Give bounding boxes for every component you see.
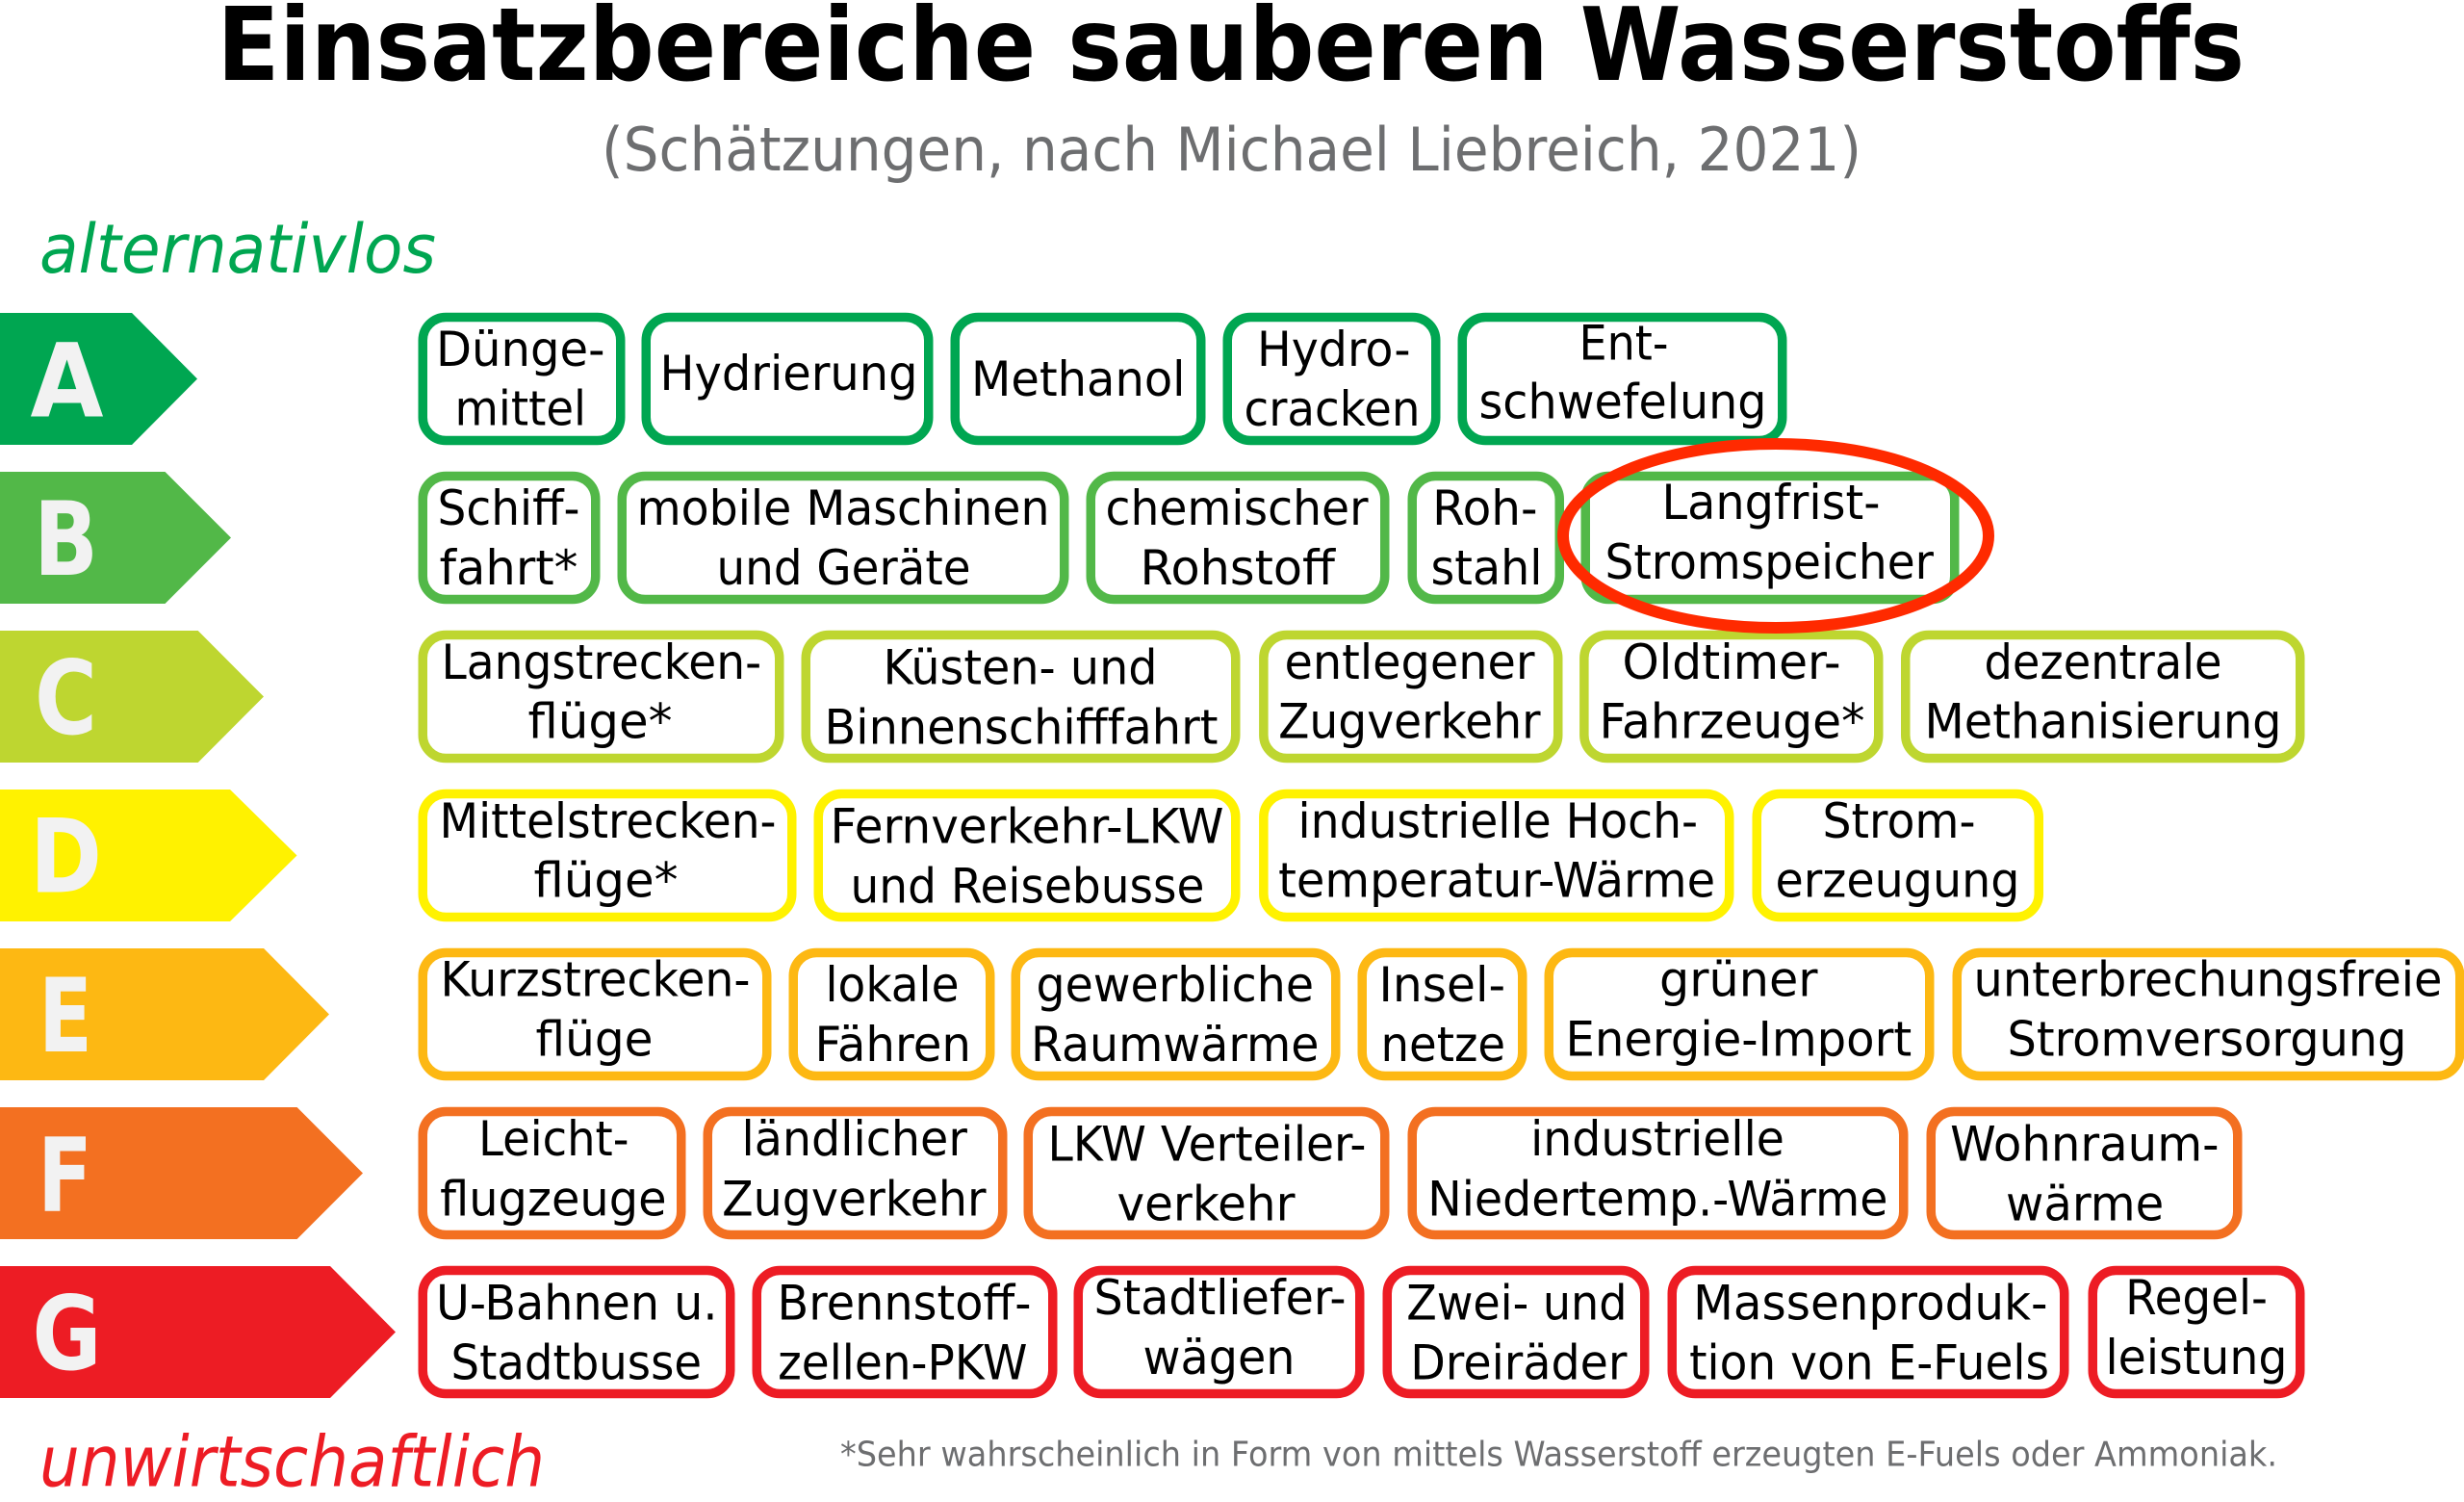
boxes F: industrielle: [1530, 1111, 1784, 1167]
boxes E: Stromversorgung: [2008, 1012, 2406, 1068]
row F: [0, 1107, 2238, 1239]
boxes D: Mittelstrecken-: [439, 793, 776, 849]
boxes A: cracken: [1244, 381, 1421, 437]
boxes F: LKW Verteiler-: [1047, 1117, 1367, 1173]
boxes E: grüner: [1659, 952, 1818, 1008]
arrow A: [0, 313, 197, 445]
boxes E: [423, 952, 2460, 1076]
arrow G: G: [33, 1275, 102, 1393]
bottom scale label: unwirtschaftlich: unwirtschaftlich: [39, 1421, 545, 1502]
arrow E: E: [38, 957, 92, 1075]
boxes G: leistung: [2106, 1330, 2287, 1385]
boxes G: Stadtbusse: [450, 1335, 702, 1391]
boxes E: Insel-: [1378, 957, 1505, 1013]
row A: [0, 313, 1783, 445]
boxes E: Energie-Import: [1565, 1012, 1912, 1068]
boxes F: Wohnraum-: [1950, 1117, 2220, 1173]
boxes B: Stromspeicher: [1605, 534, 1934, 590]
boxes B: chemischer: [1105, 480, 1369, 536]
boxes F: Leicht-: [478, 1111, 629, 1167]
boxes B: fahrt*: [439, 540, 578, 596]
footnote: *Sehr wahrscheinlich in Form von mittels Wasserstoff erzeugten E-Fuels oder Ammoniak.: [840, 1435, 2277, 1475]
boxes C: Langstrecken-: [441, 634, 761, 690]
boxes D: [423, 793, 2039, 917]
arrow F: F: [38, 1117, 92, 1235]
boxes D: und Reisebusse: [851, 859, 1205, 915]
boxes G: Dreiräder: [1410, 1335, 1628, 1391]
arrow B: [0, 472, 231, 604]
boxes E: Kurzstrecken-: [441, 952, 751, 1008]
boxes A: Methanol: [971, 351, 1186, 407]
boxes C: entlegener: [1284, 634, 1535, 690]
arrow F: [0, 1107, 363, 1239]
boxes B: Rohstoff: [1140, 540, 1337, 596]
boxes D: erzeugung: [1775, 853, 2019, 909]
boxes G: [423, 1270, 2300, 1394]
boxes B: Schiff-: [437, 480, 579, 536]
boxes A: Ent-: [1578, 316, 1669, 372]
arrow D: [0, 790, 296, 921]
boxes F: flugzeuge: [440, 1171, 666, 1227]
boxes C: Binnenschifffahrt: [824, 699, 1219, 755]
row E: [0, 948, 2460, 1080]
row B: [0, 472, 1955, 604]
arrow C: [0, 631, 264, 763]
boxes E: netze: [1380, 1017, 1505, 1073]
boxes F: wärme: [2006, 1176, 2164, 1231]
boxes D: Fernverkehr-LKW: [830, 799, 1224, 855]
subtitle: (Schätzungen, nach Michael Liebreich, 2021): [602, 115, 1861, 185]
row C: [0, 631, 2300, 763]
boxes C: flüge*: [527, 694, 672, 750]
boxes G: Stadtliefer-: [1093, 1270, 1346, 1326]
boxes F: ländlicher: [741, 1111, 967, 1167]
boxes F: [423, 1111, 2238, 1234]
boxes A: Hydrierung: [660, 346, 918, 401]
row G: [0, 1266, 2300, 1398]
boxes B: stahl: [1430, 540, 1542, 596]
boxes E: Fähren: [814, 1017, 971, 1073]
arrow B: B: [34, 480, 98, 599]
boxes F: Zugverkehr: [722, 1171, 987, 1227]
boxes G: wägen: [1143, 1330, 1296, 1385]
boxes C: dezentrale: [1985, 634, 2221, 690]
boxes C: Küsten- und: [884, 640, 1157, 696]
boxes G: tion von E-Fuels: [1689, 1335, 2049, 1391]
boxes C: Zugverkehr: [1278, 694, 1541, 750]
boxes D: industrielle Hoch-: [1297, 793, 1698, 849]
boxes B: und Geräte: [716, 540, 970, 596]
boxes A: mittel: [454, 381, 586, 437]
top scale label: alternativlos: alternativlos: [39, 210, 436, 289]
boxes D: Strom-: [1823, 793, 1975, 849]
boxes F: Niedertemp.-Wärme: [1427, 1171, 1888, 1227]
arrow E: [0, 948, 329, 1080]
boxes C: [423, 634, 2300, 759]
boxes C: Oldtimer-: [1623, 634, 1840, 690]
boxes B: Langfrist-: [1661, 475, 1881, 531]
boxes B: [423, 475, 1955, 599]
boxes G: zellen-PKW: [778, 1335, 1028, 1391]
boxes G: U-Bahnen u.: [436, 1276, 718, 1332]
boxes G: Zwei- und: [1406, 1276, 1627, 1332]
boxes B: mobile Maschinen: [637, 480, 1049, 536]
boxes E: Raumwärme: [1031, 1017, 1319, 1073]
boxes D: flüge*: [533, 853, 678, 909]
arrow A: A: [31, 322, 104, 441]
boxes A: schwefelung: [1478, 375, 1767, 430]
highlight ellipse around Langfrist-Stromspeicher: [1563, 444, 1989, 628]
boxes E: gewerbliche: [1036, 957, 1314, 1013]
boxes G: Massenproduk-: [1693, 1276, 2048, 1332]
arrow C: C: [35, 639, 97, 758]
boxes G: Brennstoff-: [778, 1276, 1032, 1332]
boxes B: Roh-: [1432, 480, 1538, 536]
boxes G: Regel-: [2125, 1270, 2268, 1326]
boxes A: Dünge-: [436, 322, 604, 377]
boxes E: unterbrechungsfreie: [1973, 952, 2443, 1008]
arrow D: D: [30, 798, 102, 917]
boxes A: [423, 316, 1783, 441]
boxes C: Fahrzeuge*: [1600, 694, 1865, 750]
row D: [0, 790, 2039, 921]
boxes F: verkehr: [1116, 1176, 1296, 1231]
boxes E: lokale: [826, 957, 959, 1013]
boxes D: temperatur-Wärme: [1278, 853, 1715, 909]
arrow G: [0, 1266, 396, 1398]
boxes A: Hydro-: [1257, 322, 1411, 377]
boxes E: flüge: [535, 1012, 653, 1068]
boxes C: Methanisierung: [1925, 694, 2281, 750]
